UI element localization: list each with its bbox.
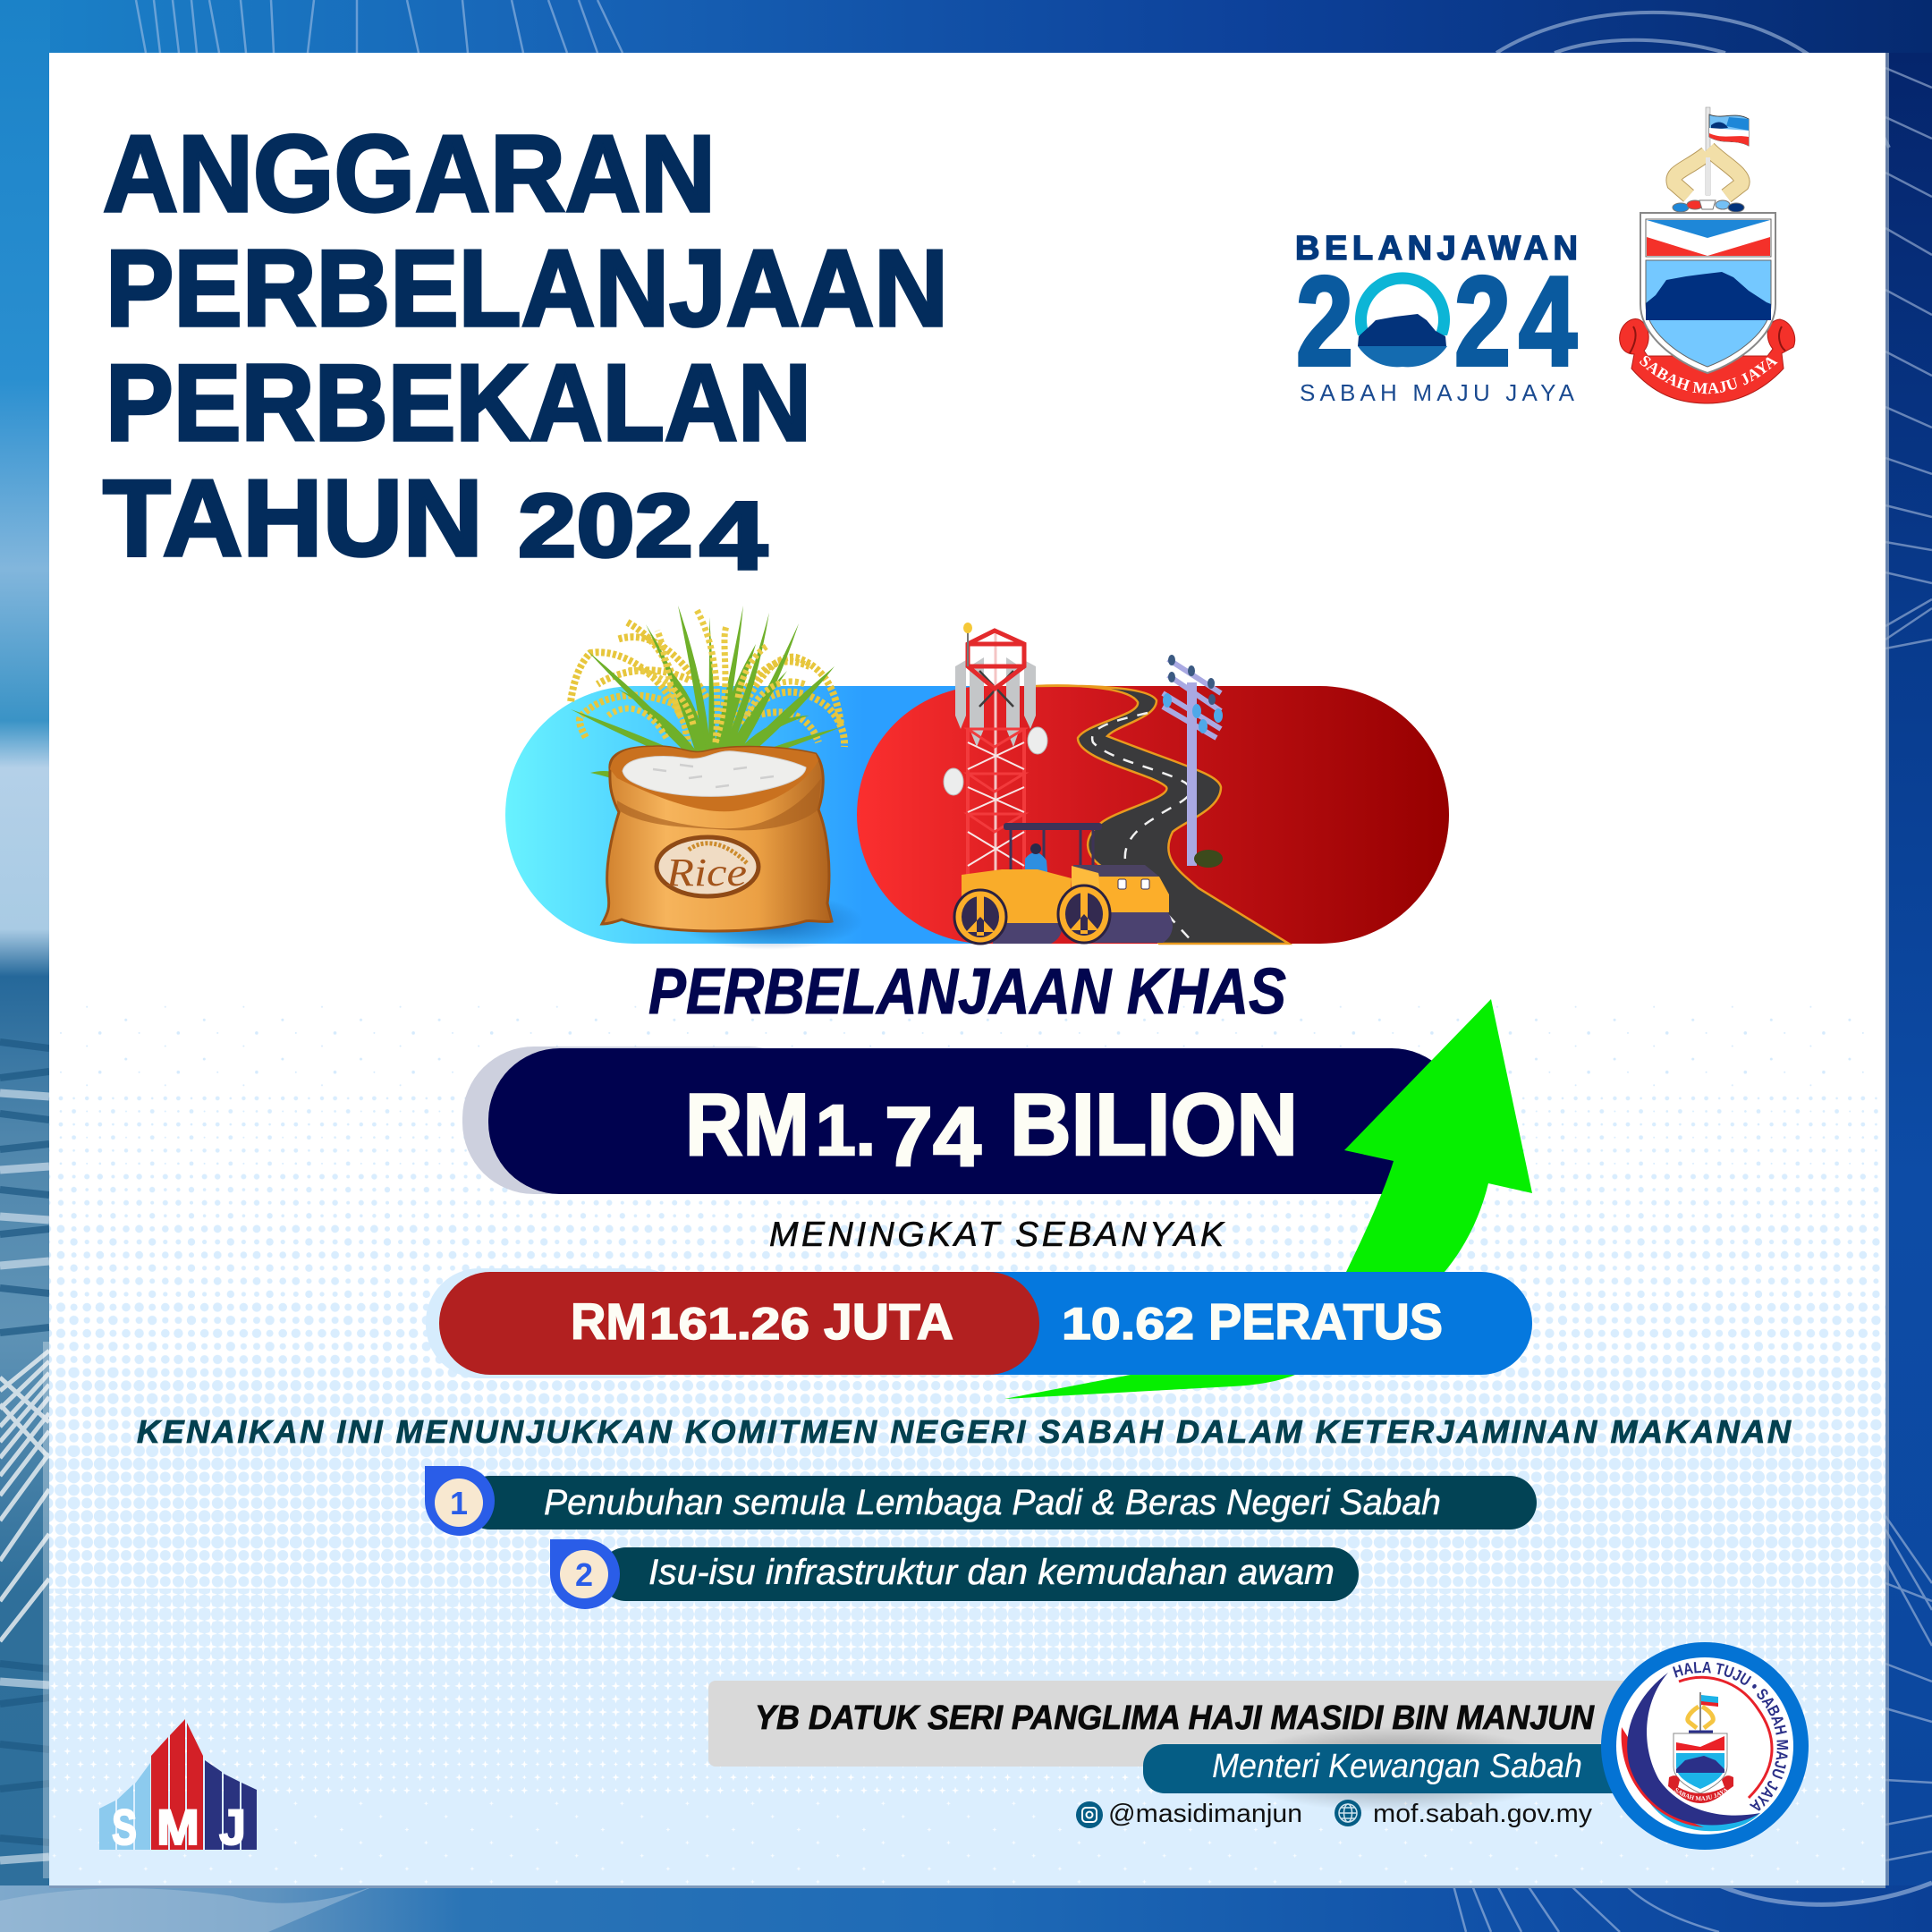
green growth arrow [1004,999,1532,1399]
list item 2: 2 [575,1556,593,1593]
title: 4 [699,481,767,589]
list item 1: Penubuhan semula Lembaga Padi & Beras Negeri Sabah [544,1483,1441,1522]
total amount text: 1. [816,1090,876,1170]
badge: Hala Tuju Sabah Maju Jaya: SABAH MAJU JAYA [1674,1788,1728,1801]
total amount text [685,1075,1298,1183]
increase pills: PERATUS [1208,1293,1443,1351]
icon: telecom tower [944,623,1047,877]
icon: road [1036,685,1289,944]
icon: rice sack [602,747,863,950]
heading: perbelanjaan khas: PERBELANJAAN KHAS [648,956,1286,1028]
badge: Hala Tuju Sabah Maju Jaya [1601,1642,1809,1850]
total amount text: RM [685,1075,809,1174]
logo: Sabah coat of arms [1619,107,1796,404]
social links [1076,1800,1593,1828]
logo: Belanjawan 2024 [1295,230,1578,406]
title: 202 [518,476,693,576]
list item 2: Isu-isu infrastruktur dan kemudahan awam [648,1553,1335,1592]
minister name block: YB DATUK SERI PANGLIMA HAJI MASIDI BIN MANJUN [755,1699,1595,1737]
title: ANGGARAN [103,113,716,234]
statement text: KENAIKAN INI MENUNJUKKAN KOMITMEN NEGERI SABAH DALAM KETERJAMINAN MAKANAN [137,1413,1792,1450]
increase pills: JUTA [824,1293,953,1351]
logo: Belanjawan 2024: 4 [1519,250,1577,393]
list item 1: 1 [450,1485,468,1521]
icon: rice plant [571,606,844,778]
social links: mof.sabah.gov.my [1373,1800,1593,1828]
increase pills: 10.62 [1062,1299,1194,1349]
icon: road roller [954,823,1173,944]
icon: utility pole [1163,655,1223,868]
logo: Belanjawan 2024: 2 [1454,250,1511,393]
total amount text: 74 [885,1089,981,1183]
title: TAHUN [103,457,483,579]
increase pills: 161.26 [649,1299,809,1349]
badge: Hala Tuju Sabah Maju Jaya: HALA TUJU • SABAH MAJU JAYA [1673,1662,1789,1811]
logo: Belanjawan 2024: 2 [1296,250,1353,393]
logo: SMJ: M [157,1799,199,1855]
minister title bar [1143,1726,1646,1812]
logo: Sabah coat of arms: SABAH MAJU JAYA [1639,356,1778,394]
icon: rice sack: Rice [665,851,747,894]
logo: SMJ: S [112,1799,137,1855]
total amount bar [462,1046,1463,1194]
title: PERBEKALAN [106,342,811,463]
logo: Belanjawan 2024: BELANJAWAN [1295,230,1578,267]
list item 2 [550,1539,1359,1609]
logo: Belanjawan 2024: SABAH MAJU JAYA [1300,379,1575,406]
list item 1 [425,1466,1537,1536]
logo: SMJ [99,1719,257,1855]
title: PERBELANJAAN [106,227,948,349]
social links: @masidimanjun [1108,1800,1302,1828]
increase pills [426,1268,1532,1378]
minister title bar: Menteri Kewangan Sabah [1212,1748,1582,1785]
illustration pills [505,686,1449,944]
label: meningkat sebanyak: MENINGKAT SEBANYAK [769,1216,1225,1254]
logo: SMJ: J [219,1799,246,1855]
increase pills: RM [571,1293,647,1351]
title [103,113,948,589]
total amount text: BILION [1010,1075,1298,1174]
minister name block [708,1681,1657,1767]
